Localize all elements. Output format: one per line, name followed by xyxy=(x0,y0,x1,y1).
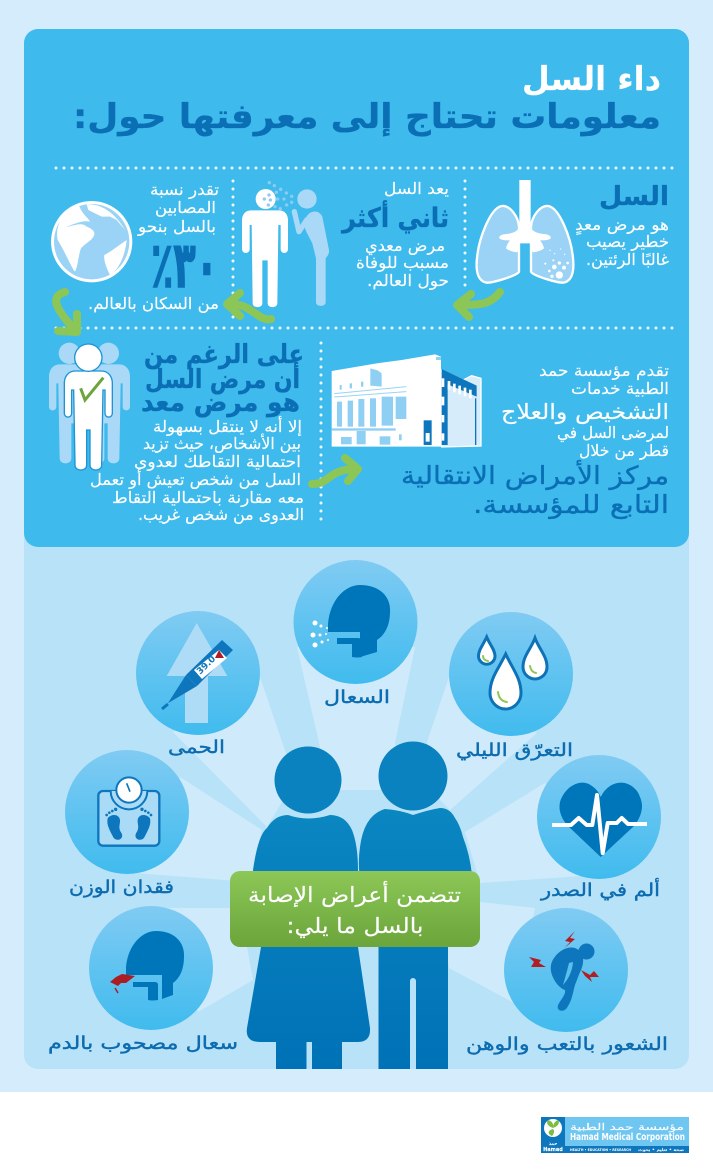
callout: symptoms intro xyxy=(230,871,480,947)
symptom: chest pain xyxy=(537,755,661,901)
text: second leading cause: ثاني أكثر xyxy=(340,200,449,234)
logo: Hamad Medical Corporation: Hamad xyxy=(543,1147,563,1153)
text: despite TB being contagious: هو مرض معد xyxy=(141,388,300,418)
title: معلومات تحتاج إلى معرفتها حول: xyxy=(73,97,661,137)
text: HMC services: تقدم مؤسسة حمد xyxy=(539,361,669,381)
symptom: coughing blood xyxy=(48,906,238,1054)
text: despite TB being contagious: أن مرض السل xyxy=(145,362,300,395)
text: second leading cause: حول العالم. xyxy=(367,271,449,291)
callout: symptoms intro: تتضمن أعراض الإصابة xyxy=(248,881,461,907)
arrow: lungs to second xyxy=(457,292,500,317)
symptom: fever: الحمى xyxy=(168,737,225,758)
text: HMC services: قطر من خلال xyxy=(579,441,669,461)
symptom: chest pain: ألم في الصدر xyxy=(540,878,660,901)
text: HMC services: مركز الأمراض الانتقالية xyxy=(401,459,669,490)
people silhouettes xyxy=(247,742,472,1069)
symptom: weight loss xyxy=(65,750,189,898)
logo: Hamad Medical Corporation: صحة • تعليم • بحوث xyxy=(638,1147,685,1152)
icon: hospital building xyxy=(332,354,481,447)
symptom: fatigue: الشعور بالتعب والوهن xyxy=(466,1034,668,1055)
text: despite TB being contagious: على الرغم من xyxy=(144,340,304,370)
icon: globe xyxy=(51,201,132,282)
text: thirty percent xyxy=(88,180,219,314)
text: despite TB being contagious: معه مقارنة باحتمالية التقاط xyxy=(112,488,304,508)
arrow: second to globe xyxy=(227,293,271,319)
title: داء السل xyxy=(522,59,661,98)
callout: symptoms intro: بالسل ما يلي: xyxy=(286,914,424,938)
symptom: night sweats: التعرّق الليلي xyxy=(456,740,573,761)
text: thirty percent: بالسل بنحو xyxy=(137,217,216,237)
title xyxy=(73,59,661,137)
text: HMC services: الطبية خدمات xyxy=(571,379,669,398)
light rays from people to symptoms xyxy=(135,647,625,1012)
icon: coughing people xyxy=(242,181,329,307)
text: thirty percent: ٣٠٪ xyxy=(151,229,218,303)
text: despite TB being contagious: بين الأشخاص، حيث تزيد xyxy=(143,433,301,454)
text: HMC services: التابع للمؤسسة. xyxy=(473,490,669,520)
panel: tuberculosis information xyxy=(24,29,689,547)
symptom: fever: 39.0 xyxy=(195,654,218,677)
logo: Hamad Medical Corporation: مؤسسة حمد الطبية xyxy=(570,1123,684,1133)
logo: Hamad Medical Corporation: حمد xyxy=(549,1141,557,1147)
symptom: fatigue xyxy=(466,908,668,1055)
text: despite TB being contagious: إلا أنه لا ينتقل بسهولة xyxy=(153,416,302,437)
text: TB definition: غالبًا الرئتين. xyxy=(586,250,669,270)
text: TB definition: خطير يصيب xyxy=(586,232,669,252)
logo: Hamad Medical Corporation: HEALTH • EDUCATION • RESEARCH xyxy=(570,1148,631,1152)
text: second leading cause: مسبب للوفاة xyxy=(356,253,449,273)
text: thirty percent: من السكان بالعالم. xyxy=(88,294,219,314)
text: HMC services xyxy=(401,361,669,520)
icon: lungs xyxy=(477,180,573,283)
footer background xyxy=(0,1092,713,1176)
panel: symptoms background xyxy=(24,500,689,1069)
text: second leading cause: يعد السل xyxy=(384,179,449,198)
symptom: cough: السعال xyxy=(324,687,390,708)
text: TB definition: السل xyxy=(599,182,669,212)
text: despite TB being contagious: العدوى من شخص غريب. xyxy=(138,505,304,525)
text: HMC services: لمرضى السل في xyxy=(557,423,669,443)
arrow: to building xyxy=(312,458,358,484)
text: TB definition: هو مرض معدٍ xyxy=(575,215,669,235)
text: despite TB being contagious: السل من شخص تعيش أو تعمل xyxy=(90,469,301,490)
symptom: night sweats xyxy=(449,612,573,761)
symptom: fever xyxy=(136,611,260,758)
symptom: coughing blood: سعال مصحوب بالدم xyxy=(48,1033,238,1054)
icon: group of people with check xyxy=(49,343,130,470)
symptom: cough xyxy=(294,560,418,708)
text: thirty percent: المصابين xyxy=(155,198,216,218)
text: thirty percent: تقدر نسبة xyxy=(150,180,219,200)
text: despite TB being contagious xyxy=(90,340,304,525)
logo: Hamad Medical Corporation xyxy=(541,1117,689,1153)
symptom: weight loss: فقدان الوزن xyxy=(69,877,174,898)
text: second leading cause: مرض معدي xyxy=(365,236,445,256)
arrow: globe to next section xyxy=(56,292,77,332)
text: second leading cause xyxy=(340,179,449,291)
text: TB definition xyxy=(575,182,669,270)
text: despite TB being contagious: احتمالية التقاطك لعدوى xyxy=(134,452,301,472)
text: HMC services: التشخيص والعلاج xyxy=(501,400,669,425)
